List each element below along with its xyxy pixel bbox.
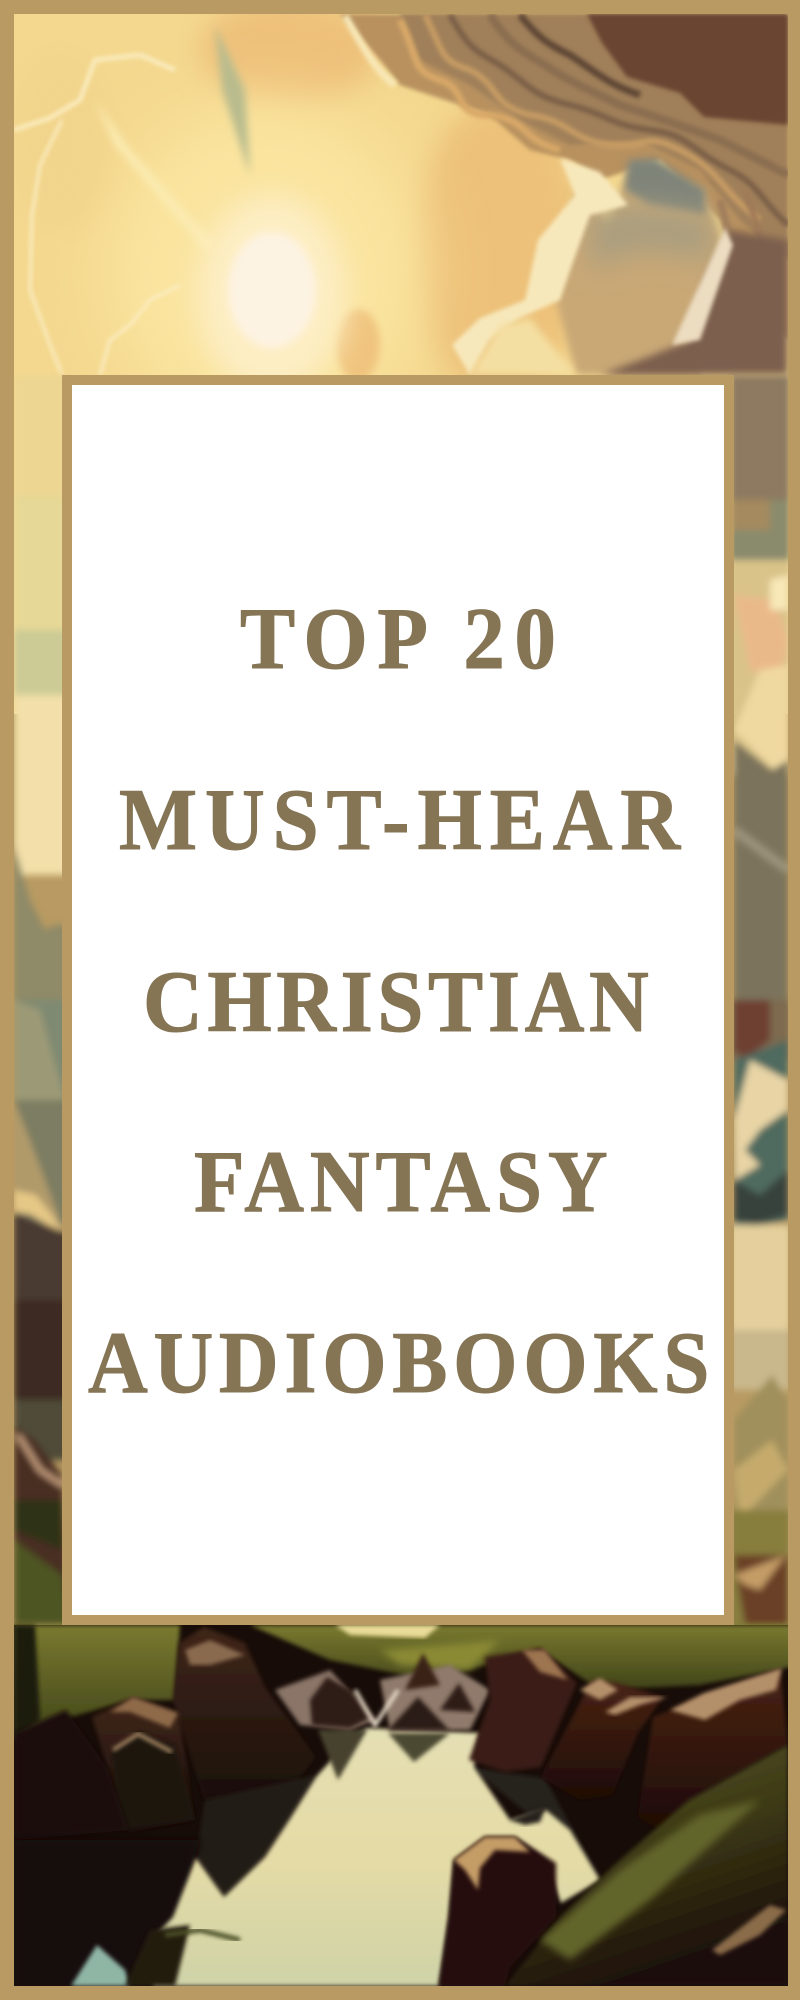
dark water shadows	[16, 1768, 592, 1894]
green hills	[14, 1625, 800, 1740]
distant cascade rocks	[275, 1653, 490, 1730]
river water	[153, 1728, 600, 1986]
valley floor base	[14, 1625, 788, 1986]
sky base	[14, 14, 788, 714]
title line: FANTASY: FANTASY	[194, 1134, 608, 1231]
white title panel with gold border	[67, 380, 729, 1620]
title line: MUST-HEAR: MUST-HEAR	[119, 772, 681, 869]
right strip landscape	[730, 375, 790, 1630]
storm opening and cream cloud edge	[452, 158, 788, 375]
right boulders	[469, 1648, 788, 1830]
title	[88, 591, 709, 1412]
foreground plant and teal water	[71, 1925, 240, 1986]
title line: CHRISTIAN: CHRISTIAN	[143, 954, 649, 1051]
mossy slope	[505, 1745, 788, 1986]
title line: TOP 20: TOP 20	[240, 591, 556, 688]
left strip landscape	[14, 492, 62, 1625]
rock reflections	[318, 1730, 546, 1825]
title line: AUDIOBOOKS: AUDIOBOOKS	[88, 1315, 709, 1412]
foreground rock	[439, 1837, 556, 1986]
sun	[197, 195, 347, 395]
swirling cliff bands top right	[340, 14, 788, 340]
left boulders	[14, 1627, 316, 1840]
sky glow and warm clouds	[14, 14, 573, 375]
